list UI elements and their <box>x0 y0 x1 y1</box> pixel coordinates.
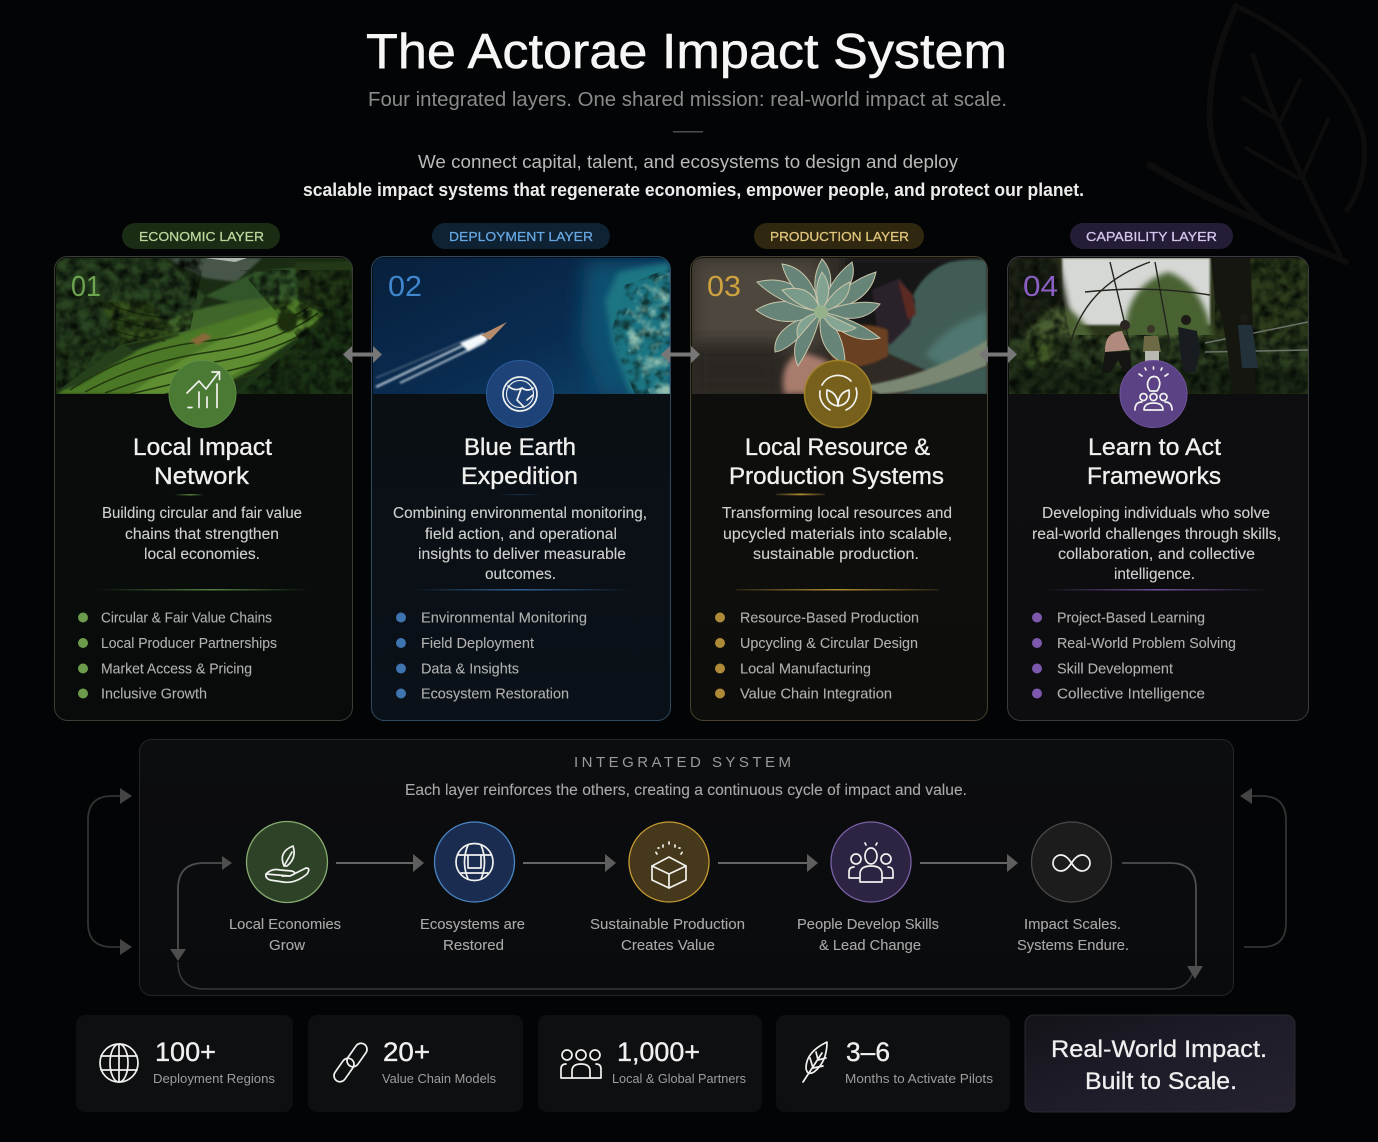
pill: production layer <box>754 223 924 249</box>
step: people <box>797 822 939 954</box>
pill: deployment layer <box>432 223 610 249</box>
arrow: card 3 to card 4 <box>979 346 1017 363</box>
feature list: Value Chain Integration <box>740 686 892 702</box>
feature list: Upcycling & Circular Design <box>740 636 918 652</box>
section description: Each layer reinforces the others, creating a continuous cycle of impact and value. <box>405 782 967 799</box>
heading <box>133 434 272 490</box>
stat: partners: 1,000+ <box>617 1037 700 1067</box>
title: The Actorae Impact System <box>366 24 1007 79</box>
heading <box>461 434 578 490</box>
callout: real-world impact: Real-World Impact. <box>1051 1036 1267 1063</box>
photo: ocean and boat <box>373 258 670 394</box>
heading: Blue Earth <box>464 434 576 461</box>
feature list: Real-World Problem Solving <box>1057 636 1236 652</box>
panel: production layer card <box>690 223 988 720</box>
description: field action, and operational <box>425 526 617 543</box>
intro text: We connect capital, talent, and ecosystems to design and deploy <box>418 151 959 172</box>
feature list <box>715 610 919 702</box>
step: ecosystems: Ecosystems are <box>420 917 525 933</box>
step: impact scales <box>1017 822 1129 954</box>
heading: Frameworks <box>1087 463 1221 490</box>
feature list <box>396 610 587 702</box>
description: chains that strengthen <box>125 526 279 543</box>
description <box>1032 505 1281 583</box>
step: people: People Develop Skills <box>797 917 939 933</box>
icon: growth chart <box>169 360 236 428</box>
intro text <box>303 151 1084 200</box>
feature list: Environmental Monitoring <box>421 610 587 626</box>
callout: real-world impact <box>1025 1015 1295 1112</box>
number 03: 03 <box>707 271 741 303</box>
heading: Learn to Act <box>1088 434 1221 461</box>
feature list: Circular & Fair Value Chains <box>101 610 272 626</box>
step: ecosystems: Restored <box>443 938 504 954</box>
arrow: card 1 to card 2 <box>343 346 382 363</box>
stat: pilots: 3–6 <box>846 1037 890 1067</box>
photo: people in dome <box>1009 258 1308 394</box>
description: collaboration, and collective <box>1058 546 1255 563</box>
stat: deployment regions: 100+ <box>155 1037 216 1067</box>
number 02: 02 <box>388 271 422 303</box>
heading: Production Systems <box>729 463 944 490</box>
feature list: Project-Based Learning <box>1057 610 1205 626</box>
stat: partners: Local & Global Partners <box>612 1071 746 1086</box>
heading: Local Impact <box>133 434 272 461</box>
callout: real-world impact: Built to Scale. <box>1085 1068 1237 1095</box>
description <box>102 505 302 563</box>
panel: integrated system <box>140 740 1234 996</box>
stat: value chain models <box>308 1015 523 1112</box>
step: local economies <box>229 822 341 954</box>
heading: Network <box>154 463 250 490</box>
arrow: step 3 to 4 <box>718 854 818 872</box>
stat: value chain models: Value Chain Models <box>382 1071 496 1086</box>
feature list <box>1032 610 1236 702</box>
step: sustainable production: Creates Value <box>621 938 715 954</box>
arrow: card 2 to card 3 <box>661 346 700 363</box>
heading: Local Resource & <box>745 434 930 461</box>
arrow: return loop <box>170 856 1203 989</box>
description: local economies. <box>144 546 260 563</box>
icon: chain link <box>332 1041 369 1084</box>
step: impact scales: Impact Scales. <box>1024 917 1121 933</box>
step: people: & Lead Change <box>819 938 921 954</box>
feature list: Field Deployment <box>421 636 534 652</box>
description: insights to deliver measurable <box>418 546 626 563</box>
pill: deployment layer: DEPLOYMENT LAYER <box>449 229 593 244</box>
icon: people <box>561 1050 601 1078</box>
arrow: step 2 to 3 <box>523 854 616 872</box>
stat: deployment regions <box>76 1015 293 1112</box>
feature list: Market Access & Pricing <box>101 662 252 678</box>
panel: capability layer card <box>1008 223 1308 720</box>
stat: pilots: Months to Activate Pilots <box>845 1071 993 1086</box>
arrow: step 1 to 2 <box>336 854 424 872</box>
stat: pilots <box>776 1015 1010 1112</box>
feature list: Skill Development <box>1057 662 1173 678</box>
feature list: Local Manufacturing <box>740 662 871 678</box>
arrow: step 4 to 5 <box>920 854 1018 872</box>
feature list: Local Producer Partnerships <box>101 636 277 652</box>
stat: value chain models: 20+ <box>383 1037 430 1067</box>
stat: deployment regions: Deployment Regions <box>153 1071 275 1086</box>
step: sustainable production: Sustainable Production <box>590 917 745 933</box>
description: Developing individuals who solve <box>1042 505 1270 522</box>
description: upcycled materials into scalable, <box>723 526 952 543</box>
intro text: scalable impact systems that regenerate economies, empower people, and protect our planet. <box>303 180 1084 200</box>
feature list: Ecosystem Restoration <box>421 686 569 702</box>
header divider <box>673 131 703 132</box>
heading <box>1087 434 1221 490</box>
heading: Expedition <box>461 463 578 490</box>
feature list: Inclusive Growth <box>101 686 207 702</box>
people <box>1102 314 1258 373</box>
pill: economic layer: ECONOMIC LAYER <box>139 229 264 244</box>
description: real-world challenges through skills, <box>1032 526 1281 543</box>
description <box>722 505 952 563</box>
step: impact scales: Systems Endure. <box>1017 938 1129 954</box>
watermark leaf <box>1150 6 1365 262</box>
photo: succulent and textiles <box>692 258 987 394</box>
feature list <box>78 610 277 702</box>
pill: capability layer: CAPABILITY LAYER <box>1086 229 1217 244</box>
feature list: Data & Insights <box>421 662 519 678</box>
icon: recycling leaf <box>804 360 872 428</box>
arrow: right outer loop <box>1240 788 1286 947</box>
section heading: INTEGRATED SYSTEM <box>574 754 791 771</box>
description: Combining environmental monitoring, <box>393 505 647 522</box>
succulent rosette <box>756 259 880 366</box>
heading <box>729 434 944 490</box>
pill: economic layer <box>122 223 280 249</box>
description <box>393 505 647 583</box>
subtitle: Four integrated layers. One shared mission: real-world impact at scale. <box>368 89 1007 111</box>
icon: leaf <box>803 1042 827 1082</box>
step: sustainable production <box>590 822 745 954</box>
step: local economies: Grow <box>269 938 305 954</box>
pill: production layer: PRODUCTION LAYER <box>770 229 909 244</box>
panel: economic layer card <box>54 223 352 720</box>
step: ecosystems <box>420 822 525 954</box>
feature list: Resource-Based Production <box>740 610 919 626</box>
description: Transforming local resources and <box>722 505 952 522</box>
panel: deployment layer card <box>372 223 670 720</box>
icon: globe <box>486 360 554 428</box>
description: Building circular and fair value <box>102 505 302 522</box>
feature list: Collective Intelligence <box>1057 686 1205 702</box>
arrow: left outer loop <box>88 788 132 955</box>
description: intelligence. <box>1114 566 1195 583</box>
step: local economies: Local Economies <box>229 917 341 933</box>
number 04: 04 <box>1023 271 1058 303</box>
icon: team and idea bulb <box>1120 360 1187 428</box>
description: sustainable production. <box>753 546 919 563</box>
number 01: 01 <box>71 271 101 303</box>
photo: rice terraces <box>56 258 352 394</box>
pill: capability layer <box>1070 223 1233 249</box>
icon: globe <box>100 1044 138 1082</box>
stat: partners <box>538 1015 762 1112</box>
description: outcomes. <box>485 566 556 583</box>
